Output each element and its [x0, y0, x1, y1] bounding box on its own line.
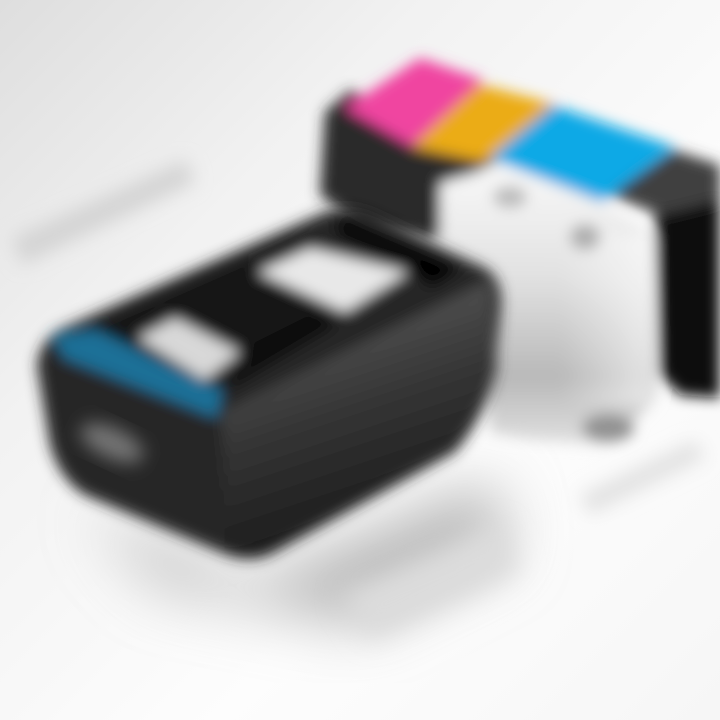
floor shadow: [90, 480, 510, 625]
rear box: dark body left: [320, 90, 500, 240]
faint label: left: [12, 160, 195, 265]
printer body: [37, 209, 501, 559]
printer black gap: [225, 310, 338, 392]
rear box: white body: [440, 165, 655, 445]
printer right face: [222, 280, 497, 556]
printer top black band: [335, 215, 462, 288]
colour strip: cyan: [490, 105, 675, 202]
rear cartridge set: [320, 58, 720, 445]
rear box: grey tab: [582, 414, 634, 442]
colour strip: dark end: [610, 150, 720, 215]
white label: far: [258, 248, 408, 312]
rear box: black body right: [655, 192, 720, 398]
rear box: grey spots: [493, 186, 527, 208]
colour strip: pink: [345, 58, 484, 146]
colour strip: orange: [412, 84, 555, 162]
faint label: bottom right: [580, 440, 705, 515]
printer top recess: [85, 235, 345, 395]
front printer: [37, 209, 501, 559]
front badge: [75, 415, 149, 471]
faint reflection: bottom: [340, 525, 520, 640]
blue strip: [53, 330, 222, 418]
white label: near: [138, 318, 240, 380]
rear box: white highlight: [560, 235, 652, 405]
rear box: grey spot right: [570, 224, 600, 250]
